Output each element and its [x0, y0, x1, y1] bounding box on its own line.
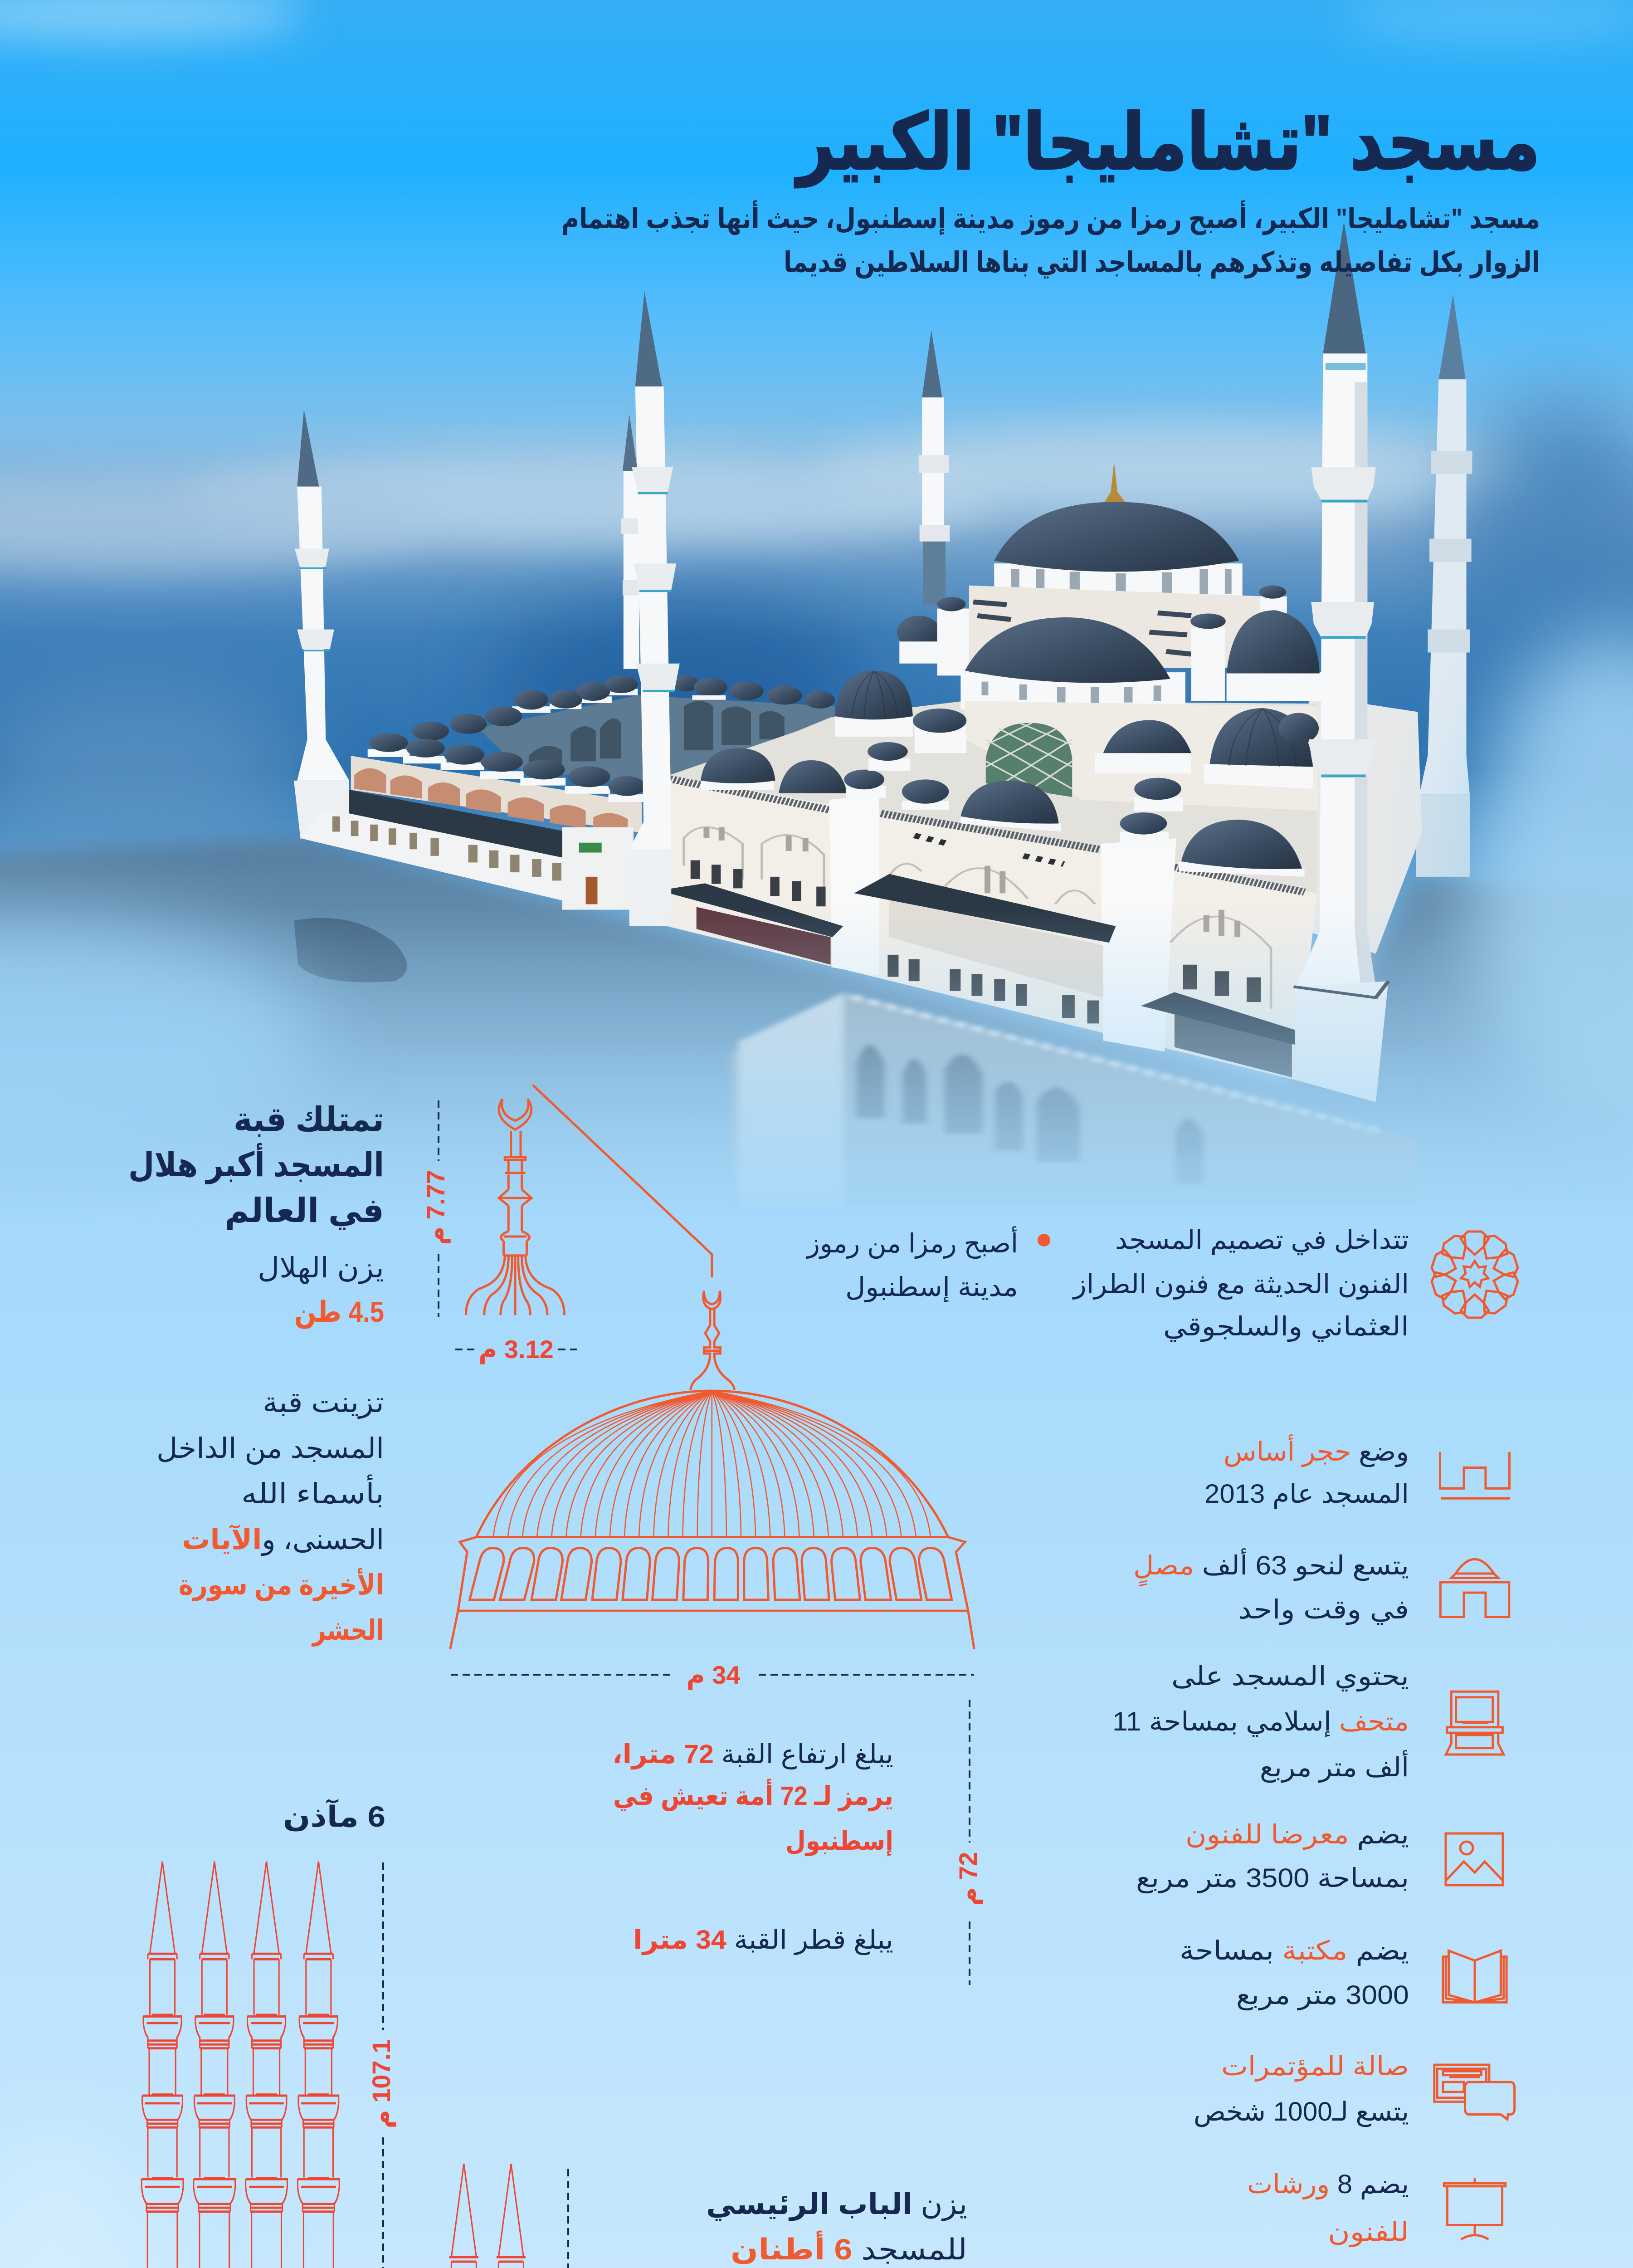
four minarets diagram	[141, 1862, 339, 2268]
door heading	[706, 2188, 967, 2266]
symbol of Istanbul note	[806, 1226, 1050, 1303]
feature: museum: ألف متر مربع	[1260, 1750, 1409, 1783]
feature: art gallery: بمساحة 3500 متر مربع	[1136, 1863, 1409, 1894]
symbol of Istanbul note: مدينة إسطنبول	[845, 1272, 1018, 1303]
feature: art gallery: يضم معرضا للفنون	[1185, 1820, 1409, 1850]
left wing wall with patterned arches	[301, 756, 642, 910]
icon: conference	[1434, 2065, 1515, 2119]
heading: largest crescent: تمتلك قبة	[234, 1100, 384, 1138]
front level domes	[701, 742, 1305, 877]
mosque photo illustration	[0, 222, 1633, 1207]
icon: picture	[1446, 1833, 1503, 1885]
dome decoration text: المسجد من الداخل	[156, 1433, 384, 1465]
plaza	[0, 838, 1633, 1207]
feature: foundation stone	[1204, 1434, 1409, 1509]
second dome	[960, 617, 1185, 710]
feature: capacity: في وقت واحد	[1238, 1595, 1409, 1625]
heading: largest crescent: المسجد أكبر هلال	[128, 1143, 384, 1184]
feature: design styles: تتداخل في تصميم المسجد	[1115, 1225, 1409, 1256]
heading: largest crescent	[128, 1100, 384, 1230]
crescent finial diagram	[466, 1099, 564, 1315]
feature: museum	[1112, 1662, 1409, 1783]
feature: museum: يحتوي المسجد على	[1171, 1662, 1409, 1692]
feature: capacity: يتسع لنحو 63 ألف مصلٍ	[1133, 1548, 1409, 1587]
roof base	[670, 701, 1317, 893]
feature: capacity	[1133, 1548, 1409, 1625]
dome decoration text: الأخيرة من سورة	[179, 1568, 384, 1601]
feature: design styles: الفنون الحديثة مع فنون الطراز	[1072, 1270, 1409, 1300]
back arcade domes	[412, 675, 835, 740]
feature: foundation stone: المسجد عام 2013	[1204, 1479, 1409, 1509]
front row small domes	[368, 733, 645, 802]
feature: workshops: للفنون	[1328, 2217, 1409, 2248]
feature: conference hall	[1194, 2052, 1409, 2127]
feature: conference hall: يتسع لـ1000 شخص	[1194, 2097, 1409, 2127]
feature: museum: متحف إسلامي بمساحة 11	[1112, 1707, 1409, 1737]
door heading: للمسجد 6 أطنان	[731, 2230, 967, 2266]
crescent width dimension: 3.12 م	[478, 1335, 554, 1364]
feature: library: 3000 متر مربع	[1236, 1980, 1409, 2011]
minaret heading: 6 مآذن	[283, 1799, 385, 1833]
main dome	[994, 462, 1243, 604]
right side wall	[1309, 695, 1422, 954]
two minarets dimension	[552, 2169, 581, 2268]
icon: screen	[1444, 2178, 1506, 2239]
dome diagram	[450, 1291, 974, 1649]
four minarets dimension: 107.1 م	[367, 2039, 396, 2128]
dome height and diameter text: يبلغ ارتفاع القبة 72 مترا،	[612, 1740, 893, 1770]
dome decoration text: بأسماء الله	[241, 1474, 384, 1510]
dome height and diameter text: يبلغ قطر القبة 34 مترا	[633, 1925, 893, 1955]
crescent weight text: يزن الهلال	[258, 1252, 384, 1285]
feature: workshops: يضم 8 ورشات	[1247, 2170, 1409, 2200]
dome height dimension: 72 م	[954, 1852, 983, 1906]
dome decoration text: الحسنى، والآيات	[182, 1524, 384, 1556]
dome height and diameter text: يرمز لـ 72 أمة تعيش في	[613, 1779, 893, 1812]
turrets	[937, 586, 1287, 701]
front minarets	[294, 222, 1389, 1102]
dome height and diameter text: إسطنبول	[785, 1826, 893, 1857]
crescent weight text: 4.5 طن	[294, 1295, 384, 1329]
dome decoration text	[156, 1387, 384, 1647]
icon: geometric rosette	[1429, 1232, 1520, 1318]
icon: prayer hall	[1440, 1559, 1509, 1617]
dome height and diameter text	[612, 1740, 893, 1955]
lower terrace	[730, 992, 1418, 1207]
connector line	[533, 1085, 712, 1277]
symbol of Istanbul note: أصبح رمزا من رموز	[806, 1226, 1018, 1259]
icon: book	[1443, 1951, 1506, 2002]
feature: library	[1180, 1936, 1409, 2011]
door heading: يزن الباب الرئيسي	[706, 2188, 967, 2221]
dome width dimension: 34 م	[687, 1661, 740, 1690]
feature: conference hall: صالة للمؤتمرات	[1221, 2052, 1409, 2082]
crescent height dimension: 7.77 م	[421, 1170, 451, 1245]
feature: foundation stone: وضع حجر أساس	[1224, 1434, 1409, 1467]
dome decoration text: تزينت قبة	[263, 1387, 384, 1419]
two minarets diagram	[444, 2164, 531, 2268]
heading: largest crescent: في العالم	[224, 1192, 384, 1230]
icon: museum	[1446, 1691, 1504, 1755]
stepped roofs	[969, 586, 1267, 668]
facade	[629, 775, 1317, 1080]
mid wall and lattice window	[965, 701, 1317, 811]
crescent weight text	[258, 1252, 384, 1329]
feature: workshops	[1247, 2170, 1409, 2248]
back minarets	[621, 294, 1472, 877]
icon: foundation	[1440, 1452, 1510, 1498]
intro text	[561, 200, 1540, 279]
mid level domes	[835, 670, 1319, 789]
feature: design styles: العثماني والسلجوقي	[1163, 1312, 1409, 1342]
feature: design styles	[1072, 1225, 1409, 1342]
dome decoration text: الحشر	[312, 1615, 384, 1647]
feature: art gallery	[1136, 1820, 1409, 1894]
feature: library: يضم مكتبة بمساحة	[1180, 1936, 1409, 1966]
third dome	[1227, 610, 1321, 701]
courtyard	[478, 695, 835, 786]
fog over plaza	[0, 631, 1633, 1361]
